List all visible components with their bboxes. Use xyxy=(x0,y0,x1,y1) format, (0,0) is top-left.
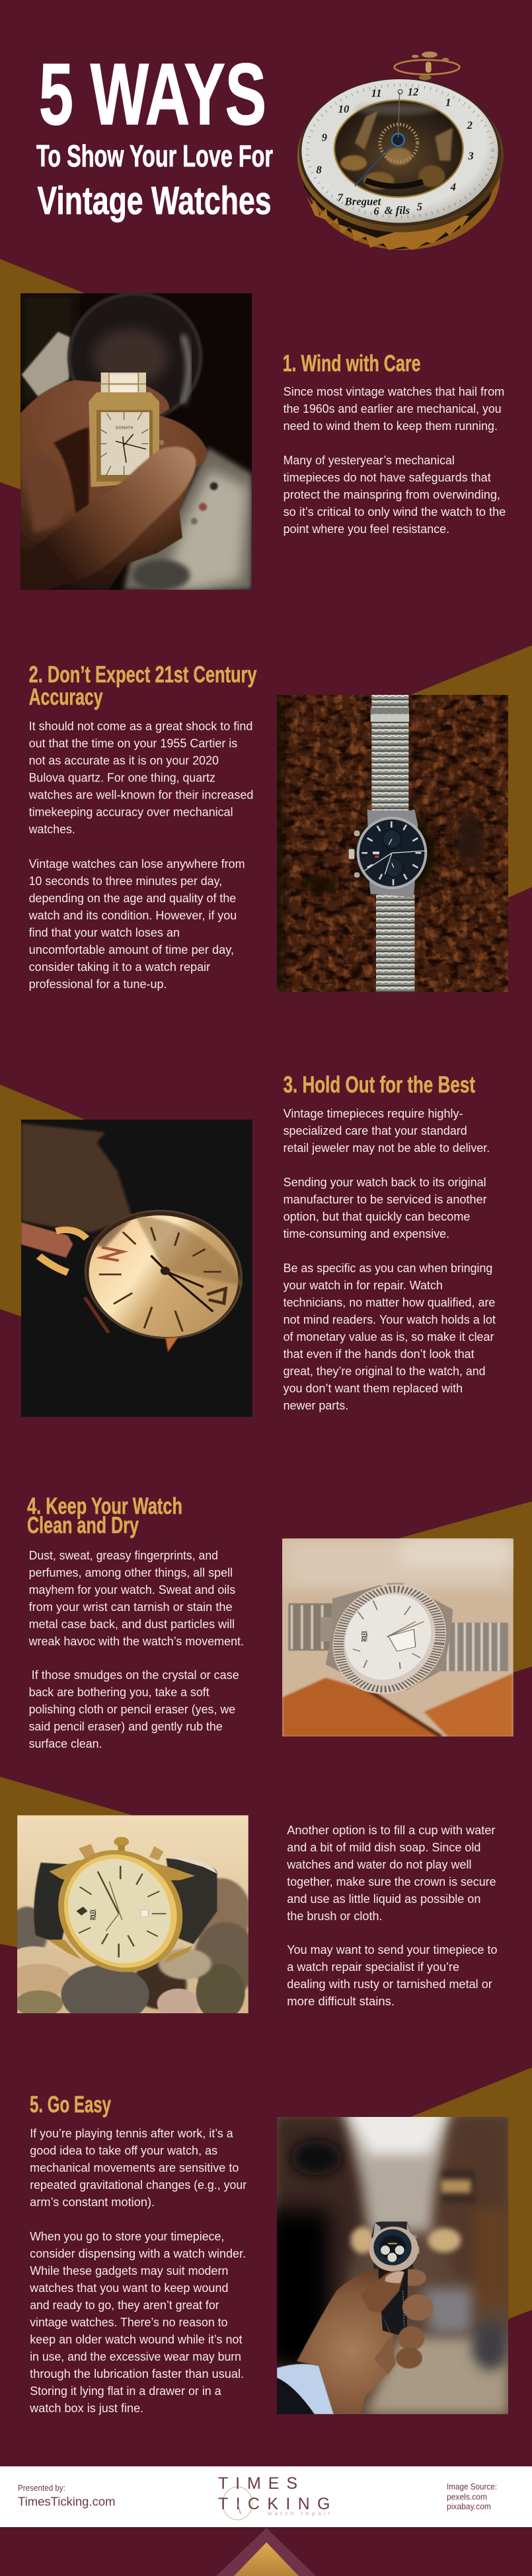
heading: 1. Wind with Care: 1. Wind with Care xyxy=(283,351,421,376)
text: section 5: watch box is just fine. xyxy=(29,2402,143,2415)
image source: pexels.com xyxy=(447,2491,487,2502)
text: section 1: so it’s critical to only wind the watch to the xyxy=(284,505,506,519)
text: section 4 continued: more difficult stains. xyxy=(287,1995,395,2008)
image source: Image Source: xyxy=(447,2482,497,2491)
text: section 5: vintage watches. There’s no reason to xyxy=(30,2316,227,2329)
photo: hand holding gold rectangular watch: SONATA xyxy=(116,426,133,431)
icon: antique pocket watch: 6 xyxy=(373,205,379,217)
text: section 2: depending on the age and quality of the xyxy=(29,892,236,905)
icon: antique pocket watch: 8 xyxy=(316,164,322,176)
text: section 2: Bulova quartz. For one thing, quartz xyxy=(29,771,215,785)
text: section 4: wreak havoc with the watch’s movement. xyxy=(28,1635,244,1648)
icon: antique pocket watch: & fils xyxy=(385,204,410,217)
text: section 5: If you’re playing tennis after work, it’s a xyxy=(30,2127,234,2140)
bottom chevron: outer triangle xyxy=(216,2528,316,2576)
heading: 5. Go Easy: 5. Go Easy xyxy=(30,2092,111,2118)
text: section 5: mechanical movements are sensitive to xyxy=(30,2161,239,2174)
gold triangle: section 4 xyxy=(399,1501,532,1672)
title xyxy=(36,46,273,223)
text: section 4: back are bothering you, take a soft xyxy=(29,1686,209,1699)
text: section 4: metal case back, and dust particles will xyxy=(29,1618,235,1631)
text: section 5: arm’s constant motion). xyxy=(30,2196,155,2209)
icon: antique pocket watch: 4 xyxy=(450,180,456,193)
photo: gold Rolex with black strap on pebbles xyxy=(17,1815,248,2013)
text: section 4 continued: a watch repair specialist if you’re xyxy=(287,1960,459,1974)
icon: antique pocket watch: 5 xyxy=(417,200,422,213)
text: section 4 continued: You may want to send your timepiece to xyxy=(287,1943,497,1956)
text: section 3: retail jeweler may not be able to deliver. xyxy=(284,1141,490,1155)
text: section 1: timepieces do not have safeguards that xyxy=(284,471,491,484)
text: section 3: time-consuming and expensive. xyxy=(284,1227,449,1240)
presented by: Presented by: xyxy=(18,2483,65,2493)
icon: antique pocket watch: 7 xyxy=(338,192,344,204)
text: section 2: Vintage watches can lose anywhere from xyxy=(29,857,245,871)
gold triangle: section 5 xyxy=(410,2067,532,2319)
text: section 5: keep an older watch wound while it’s not xyxy=(30,2333,242,2346)
logo: Times Ticking watch repair: TICKING xyxy=(218,2495,330,2513)
text: section 4: perfumes, among other things, all spell xyxy=(29,1566,233,1579)
text: section 3 xyxy=(284,1107,496,1412)
text: section 3: your watch in for repair. Watch xyxy=(284,1279,443,1292)
text: section 5: through the lubrication faster than usual. xyxy=(30,2367,244,2380)
text: section 5: watches that you want to keep wound xyxy=(29,2281,229,2295)
text: section 2: timekeeping accuracy over mechanical xyxy=(29,806,233,819)
text: section 2: consider taking it to a watch repair xyxy=(29,960,210,974)
heading: 4. Keep Your Watch Clean and Dry: 4. Keep Your Watch xyxy=(27,1493,182,1519)
bottom chevron: inner triangle xyxy=(234,2542,299,2576)
text: section 4: polishing cloth or pencil eraser (yes, we xyxy=(29,1703,235,1716)
text: section 3: technicians, no matter how qualified, are xyxy=(284,1296,495,1309)
text: section 4 continued xyxy=(286,1824,497,2008)
text: section 2: watches. xyxy=(28,823,75,836)
heading: 2. Don't Expect 21st Century Accuracy: Accuracy xyxy=(29,684,103,710)
text: section 4: surface clean. xyxy=(29,1737,102,1750)
gold triangle: section 3 xyxy=(0,1085,85,1316)
text: section 3: of monetary value as is, so make it clear xyxy=(284,1330,494,1343)
text: section 3: not mind readers. Your watch holds a lot xyxy=(284,1313,496,1326)
text: section 2: watches are well-known for their increased xyxy=(28,789,253,802)
photo: hand holding chronograph in blurred street xyxy=(264,2108,510,2414)
text: section 3: great, they’re original to the watch, and xyxy=(284,1365,485,1378)
heading: 2. Don't Expect 21st Century Accuracy xyxy=(29,662,257,710)
text: section 3: Vintage timepieces require highly- xyxy=(284,1107,463,1120)
text: section 4: Dust, sweat, greasy fingerprints, and xyxy=(29,1549,218,1562)
text: section 1: need to wind them to keep them running. xyxy=(284,419,498,433)
text: section 5: While these gadgets may suit modern xyxy=(30,2264,228,2277)
text: section 2: uncomfortable amount of time per day, xyxy=(29,943,234,956)
presented by: TimesTicking.com xyxy=(18,2495,115,2509)
logo: Times Ticking watch repair: watch repair xyxy=(267,2510,330,2517)
text: section 3: specialized care that your standard xyxy=(284,1124,467,1137)
text: section 4 continued: dealing with rusty or tarnished metal or xyxy=(287,1978,492,1991)
text: section 5: repeated gravitational changes (e.g., your xyxy=(30,2178,247,2192)
text: section 3: manufacturer to be serviced is another xyxy=(284,1193,487,1206)
text: section 4: If those smudges on the crystal or case xyxy=(32,1668,239,1682)
heading: 4. Keep Your Watch Clean and Dry: Clean and Dry xyxy=(27,1513,139,1538)
gold triangle: section 4 continued xyxy=(0,1777,132,1947)
text: section 1: point where you feel resistance. xyxy=(284,522,449,536)
presented by xyxy=(18,2483,115,2509)
title: 5 WAYS xyxy=(39,46,266,143)
text: section 3: you don’t want them replaced with xyxy=(284,1382,463,1395)
text: section 4: from your wrist can tarnish or stain the xyxy=(29,1600,233,1614)
logo: Times Ticking watch repair: TIMES xyxy=(218,2474,297,2493)
photo: watch dial lit in darkness xyxy=(21,1120,262,1417)
text: section 1: the 1960s and earlier are mechanical, you xyxy=(284,402,502,415)
text: section 4 xyxy=(28,1549,244,1750)
icon: antique pocket watch: 12 xyxy=(408,86,418,98)
icon: antique pocket watch: 9 xyxy=(322,131,328,143)
text: section 2: not as accurate as it is on your 2020 xyxy=(29,754,219,768)
text: section 3: that even if the hands don’t look that xyxy=(284,1347,475,1361)
photo: silver Rolex on orange leather: ROLEX xyxy=(360,1631,369,1641)
text: section 1 xyxy=(284,385,506,536)
photo: chronograph with mesh strap on dark wood xyxy=(268,695,508,992)
text: section 3: newer parts. xyxy=(284,1399,348,1412)
text: section 2: 10 seconds to three minutes per day, xyxy=(29,875,222,888)
text: section 5 xyxy=(29,2127,247,2415)
photo: hand holding gold rectangular watch xyxy=(20,293,252,590)
icon: antique pocket watch: Breguet xyxy=(344,196,382,208)
icon: antique pocket watch: 3 xyxy=(467,150,474,162)
text: section 4 continued: and use as little liquid as possible on xyxy=(287,1892,480,1906)
photo: gold Rolex with black strap on pebbles: ROLEX xyxy=(89,1910,97,1920)
photo: silver Rolex on orange leather xyxy=(282,1538,513,1736)
heading: 2. Don't Expect 21st Century Accuracy: 2. Don’t Expect 21st Century xyxy=(29,662,257,688)
image source xyxy=(447,2482,497,2511)
text: section 5: consider dispensing with a watch winder. xyxy=(30,2247,246,2260)
text: section 5: in use, and the excessive wear may burn xyxy=(30,2350,241,2363)
text: section 2: out that the time on your 1955 Cartier is xyxy=(29,737,237,750)
icon: antique pocket watch xyxy=(297,52,504,250)
text: section 1: Since most vintage watches that hail from xyxy=(284,385,504,398)
text: section 4 continued: Another option is to fill a cup with water xyxy=(287,1824,496,1837)
icon: antique pocket watch: 1 xyxy=(445,96,451,109)
gold triangle: section 1 xyxy=(0,259,85,489)
text: section 4: mayhem for your watch. Sweat and oils xyxy=(29,1583,235,1596)
text: section 2: watch and its condition. However, if you xyxy=(28,909,237,922)
text: section 5: Storing it lying flat in a drawer or in a xyxy=(30,2384,222,2398)
text: section 4 continued: and a bit of mild dish soap. Since old xyxy=(287,1841,480,1854)
text: section 5: and ready to go, they aren’t great for xyxy=(30,2299,219,2312)
text: section 4 continued: watches and water do not play well xyxy=(286,1858,472,1871)
icon: antique pocket watch: 2 xyxy=(467,119,473,131)
icon: antique pocket watch: 11 xyxy=(371,87,381,100)
logo: Times Ticking watch repair xyxy=(218,2474,330,2520)
text: section 1: Many of yesteryear’s mechanical xyxy=(284,454,455,467)
title: Vintage Watches xyxy=(37,179,271,223)
title: To Show Your Love For xyxy=(36,139,273,173)
heading: 4. Keep Your Watch Clean and Dry xyxy=(27,1493,182,1538)
text: section 3: option, but that quickly can become xyxy=(284,1210,470,1223)
text: section 1: protect the mainspring from overwinding, xyxy=(284,488,500,501)
gold triangle: section 2 xyxy=(410,645,532,898)
text: section 4: said pencil eraser) and gently rub the xyxy=(29,1720,223,1733)
icon: antique pocket watch: 10 xyxy=(338,103,350,116)
text: section 2 xyxy=(28,720,253,991)
footer band xyxy=(0,2466,532,2527)
text: section 4 continued: the brush or cloth. xyxy=(287,1910,382,1923)
text: section 2: find that your watch loses an xyxy=(29,926,180,939)
text: section 2: professional for a tune-up. xyxy=(29,978,167,991)
text: section 4 continued: together, make sure the crown is secure xyxy=(287,1875,496,1888)
text: section 5: good idea to take off your watch, as xyxy=(30,2144,217,2157)
text: section 3: Sending your watch back to its original xyxy=(284,1176,486,1189)
text: section 3: Be as specific as you can when bringing xyxy=(284,1262,492,1275)
image source: pixabay.com xyxy=(447,2501,491,2511)
text: section 5: When you go to store your timepiece, xyxy=(30,2230,224,2243)
text: section 2: It should not come as a great shock to find xyxy=(29,720,252,733)
